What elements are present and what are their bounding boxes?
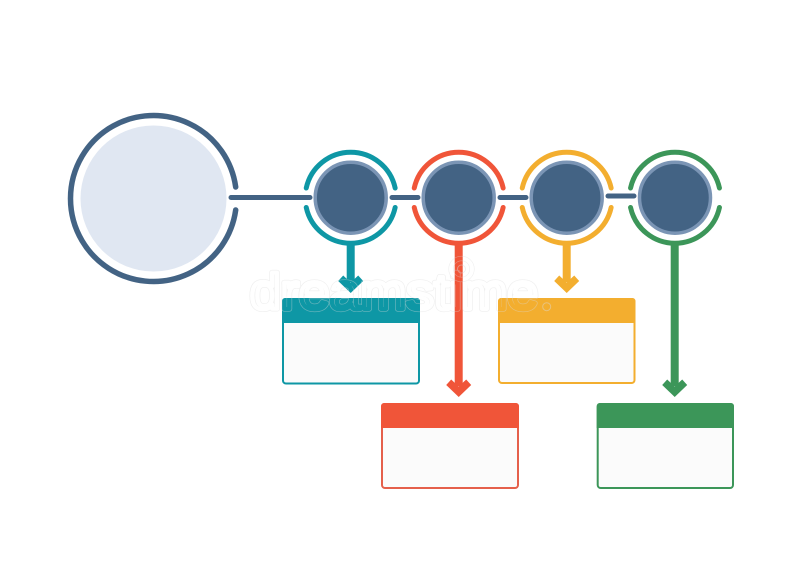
box 4: green [597,403,734,488]
watermark [250,256,552,312]
arrow 1: teal [338,244,363,293]
box 1: teal [282,298,420,384]
connector lines [231,196,634,198]
arrow 4: green [662,244,687,397]
arrow 3: yellow [554,244,579,293]
box 2: red [381,403,519,488]
node 2: red [414,152,503,243]
node 3: yellow [522,152,611,243]
arrow 2: red [446,244,471,397]
box 3: yellow [498,298,636,383]
node 4: green [631,152,719,243]
main circle [71,116,236,282]
node 1: teal [306,152,395,243]
